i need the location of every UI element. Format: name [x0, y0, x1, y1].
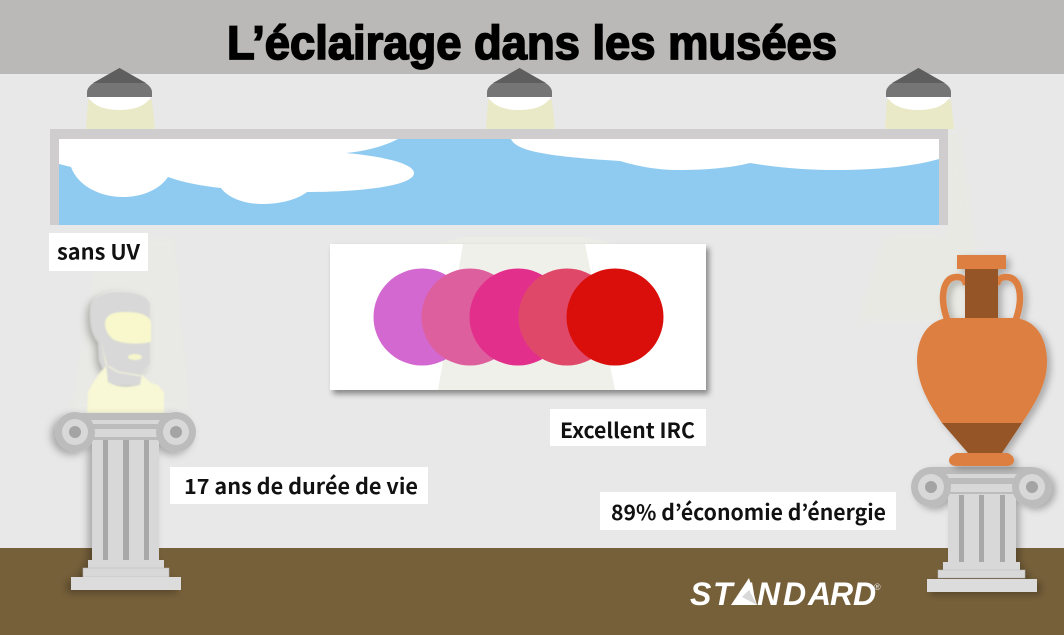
capital: [75, 413, 176, 440]
bust statue: [87, 292, 164, 413]
circle: magenta: [470, 268, 566, 366]
label: Excellent IRC: Excellent IRC: [560, 415, 695, 445]
label: 17 ans de durée de vie: 17 ans de durée de vie: [184, 471, 418, 501]
capital: [932, 467, 1033, 494]
handles: [943, 277, 966, 319]
colour swatch panel: [330, 244, 706, 390]
lamp: left: [86, 68, 155, 129]
lamp: centre: [486, 68, 555, 129]
label: sans UV: [49, 233, 148, 271]
logo triangle: [731, 578, 757, 605]
panoramic sky painting: [50, 129, 948, 225]
lip: [957, 255, 1006, 269]
shaft: [92, 440, 159, 560]
amphora vase: [917, 255, 1047, 466]
header band: [0, 0, 1064, 74]
cloud: left: [59, 139, 414, 204]
lower band: [942, 423, 1022, 453]
title: L’éclairage dans les musées: [227, 16, 837, 69]
light beams on the wall: [70, 130, 985, 412]
label: Excellent IRC: [550, 409, 706, 446]
shaft: [948, 493, 1016, 562]
circle: violet: [374, 268, 470, 366]
left column: [55, 412, 196, 590]
logo: STANDARD: ®: [874, 582, 881, 592]
label: sans UV: sans UV: [57, 236, 141, 266]
neck: [965, 268, 998, 318]
label: 89% d'économie d'énergie: 89% d’économie d’énergie: [611, 497, 886, 527]
circle: red: [566, 268, 664, 366]
right column: [911, 467, 1052, 592]
lamp: right: [885, 68, 954, 129]
logo: STANDARD: STANDARD: [690, 576, 876, 612]
foot: [949, 453, 1014, 466]
floor: [0, 548, 1064, 635]
circle: coral: [518, 268, 616, 366]
circle: rose: [422, 268, 518, 366]
cloud: right: [511, 139, 939, 170]
body: [917, 318, 1047, 423]
base: [943, 562, 1020, 570]
base: [88, 560, 164, 568]
